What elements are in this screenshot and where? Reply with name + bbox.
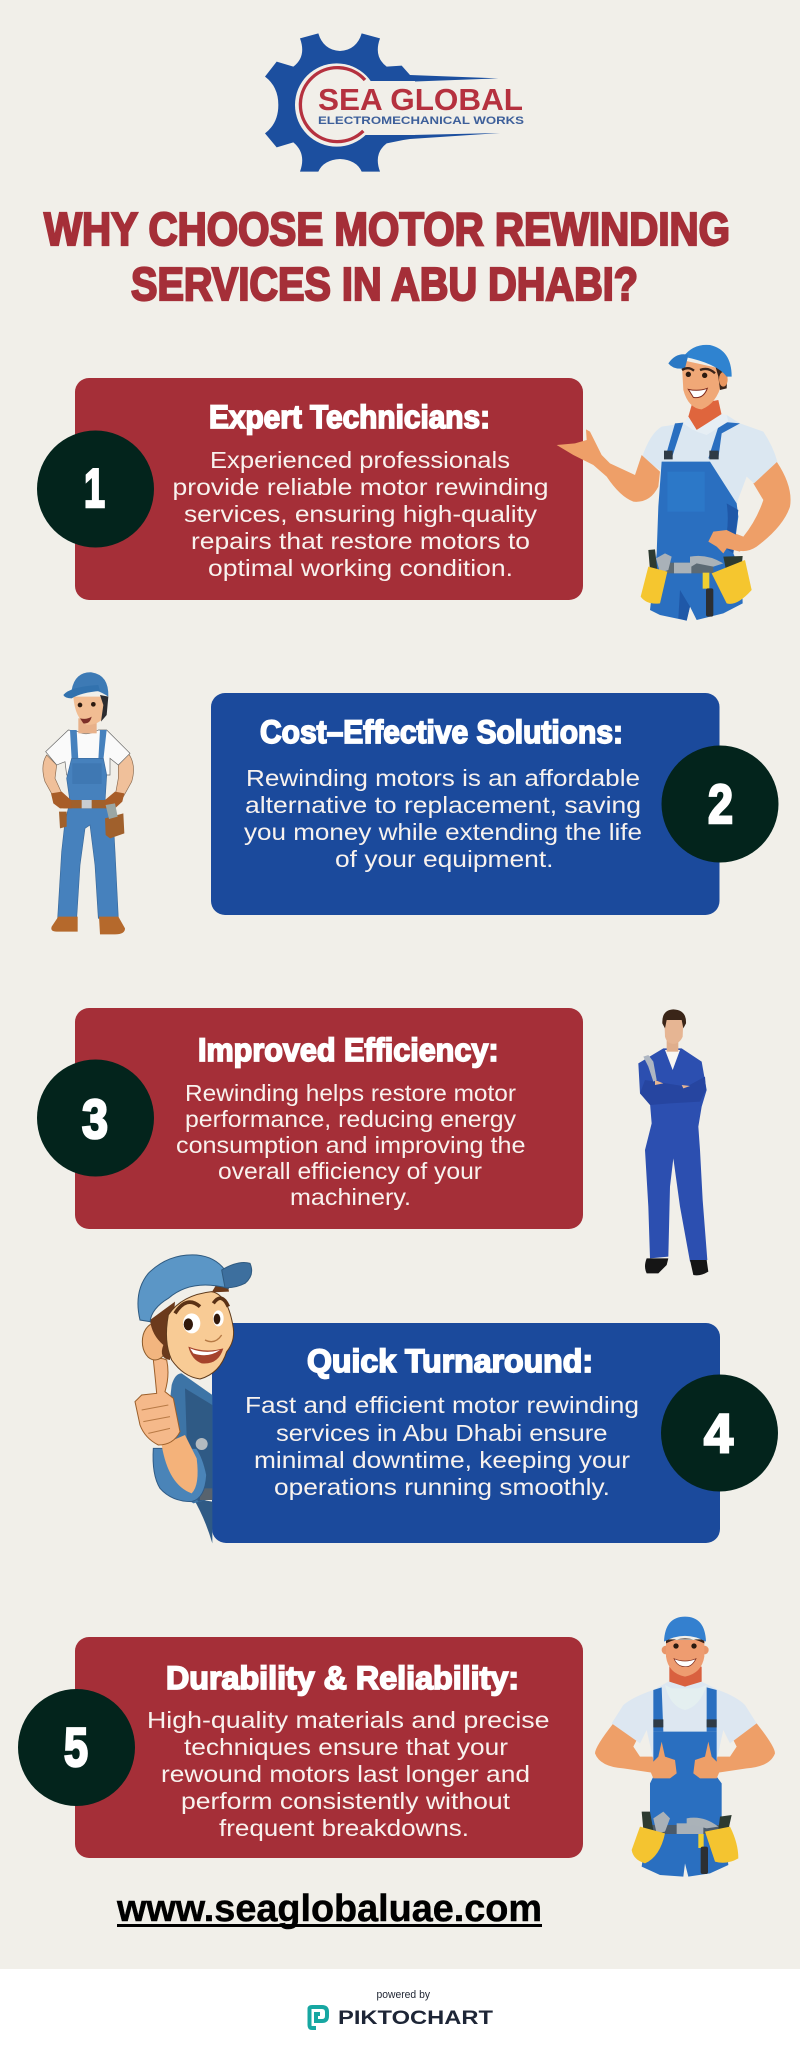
icon: Piktochart logo (310, 2007, 327, 2028)
heading: quick turnaround: Quick Turnaround: (307, 1343, 593, 1379)
number badge 5 (18, 1689, 135, 1806)
text block: expert technicians: services, ensuring high-quality (184, 501, 538, 527)
illustration: engineer with crossed arms (638, 1009, 708, 1275)
text block: expert technicians: optimal working condition. (208, 555, 513, 581)
text block: improved efficiency: consumption and improving the (176, 1132, 526, 1158)
heading: improved efficiency: Improved Efficiency: (198, 1032, 498, 1068)
text block: cost-effective solutions: alternative to replacement, saving (245, 792, 641, 818)
text block: durability and reliability: perform consistently without (181, 1788, 511, 1814)
logo: Sea Global gear (265, 33, 524, 172)
text block: cost-effective solutions: Rewinding motors is an affordable (246, 765, 640, 791)
heading: expert technicians: Expert Technicians: (209, 399, 490, 435)
number badge 2 (662, 746, 778, 862)
footer wordmark: PIKTOCHART (338, 2008, 493, 2029)
panel: quick turnaround (212, 1323, 778, 1543)
text block: cost-effective solutions (244, 765, 642, 872)
text block: improved efficiency: performance, reducing energy (185, 1106, 517, 1132)
text block: durability and reliability: frequent breakdowns. (219, 1815, 469, 1841)
text block: quick turnaround: minimal downtime, keeping your (254, 1447, 630, 1473)
panel: improved efficiency (37, 1008, 583, 1229)
number badge 3: 3 (82, 1088, 108, 1150)
icon: gear (265, 33, 500, 172)
text block: expert technicians: Experienced professionals (210, 447, 510, 473)
illustration: cartoon technician thumbs up (135, 1255, 252, 1543)
panel: durability and reliability (18, 1637, 583, 1858)
number badge 1: 1 (84, 457, 105, 519)
number badge 3 (37, 1060, 154, 1176)
text block: durability and reliability (147, 1707, 550, 1841)
text block: durability and reliability: rewound motors last longer and (161, 1761, 530, 1787)
text block: quick turnaround: Fast and efficient motor rewinding (245, 1392, 639, 1418)
text block: improved efficiency: overall efficiency of your (218, 1158, 482, 1184)
footer: powered by Piktochart (0, 1969, 800, 2050)
text block: durability and reliability: techniques ensure that your (184, 1734, 508, 1760)
panel: expert technicians (37, 378, 583, 600)
logo wordmark: SEA GLOBAL (318, 82, 523, 117)
heading: durability and reliability: Durability & Reliability: (166, 1660, 519, 1696)
illustration: technician standing with tool belt (43, 672, 134, 934)
number badge 2: 2 (708, 773, 733, 835)
text block: expert technicians: repairs that restore motors to (191, 528, 530, 554)
illustration: technician presenting (557, 345, 791, 621)
title (44, 203, 730, 310)
website link: www.seaglobaluae.com (116, 1888, 542, 1930)
heading: cost-effective solutions: Cost–Effective Solutions: (260, 714, 623, 750)
text block: quick turnaround (245, 1392, 639, 1500)
text block: quick turnaround: operations running smoothly. (274, 1474, 610, 1500)
illustration: technician two thumbs up (595, 1617, 775, 1877)
text block: improved efficiency (176, 1080, 526, 1210)
text block: quick turnaround: services in Abu Dhabi ensure (276, 1420, 608, 1446)
text block: cost-effective solutions: you money while extending the life (244, 819, 642, 845)
text block: durability and reliability: High-quality materials and precise (147, 1707, 550, 1733)
logo tagline: ELECTROMECHANICAL WORKS (318, 115, 524, 127)
text block: improved efficiency: machinery. (290, 1184, 411, 1210)
number badge 4 (661, 1374, 778, 1492)
number badge 4: 4 (704, 1402, 733, 1464)
text block: cost-effective solutions: of your equipment. (335, 846, 554, 872)
footer caption: powered by (376, 1989, 430, 2001)
text block: expert technicians (172, 447, 548, 581)
panel: cost-effective solutions (211, 693, 778, 915)
text block: improved efficiency: Rewinding helps restore motor (185, 1080, 516, 1106)
title: SERVICES IN ABU DHABI? (131, 258, 638, 310)
number badge 5: 5 (64, 1716, 88, 1778)
text block: expert technicians: provide reliable motor rewinding (172, 474, 548, 500)
number badge 1 (37, 430, 154, 548)
